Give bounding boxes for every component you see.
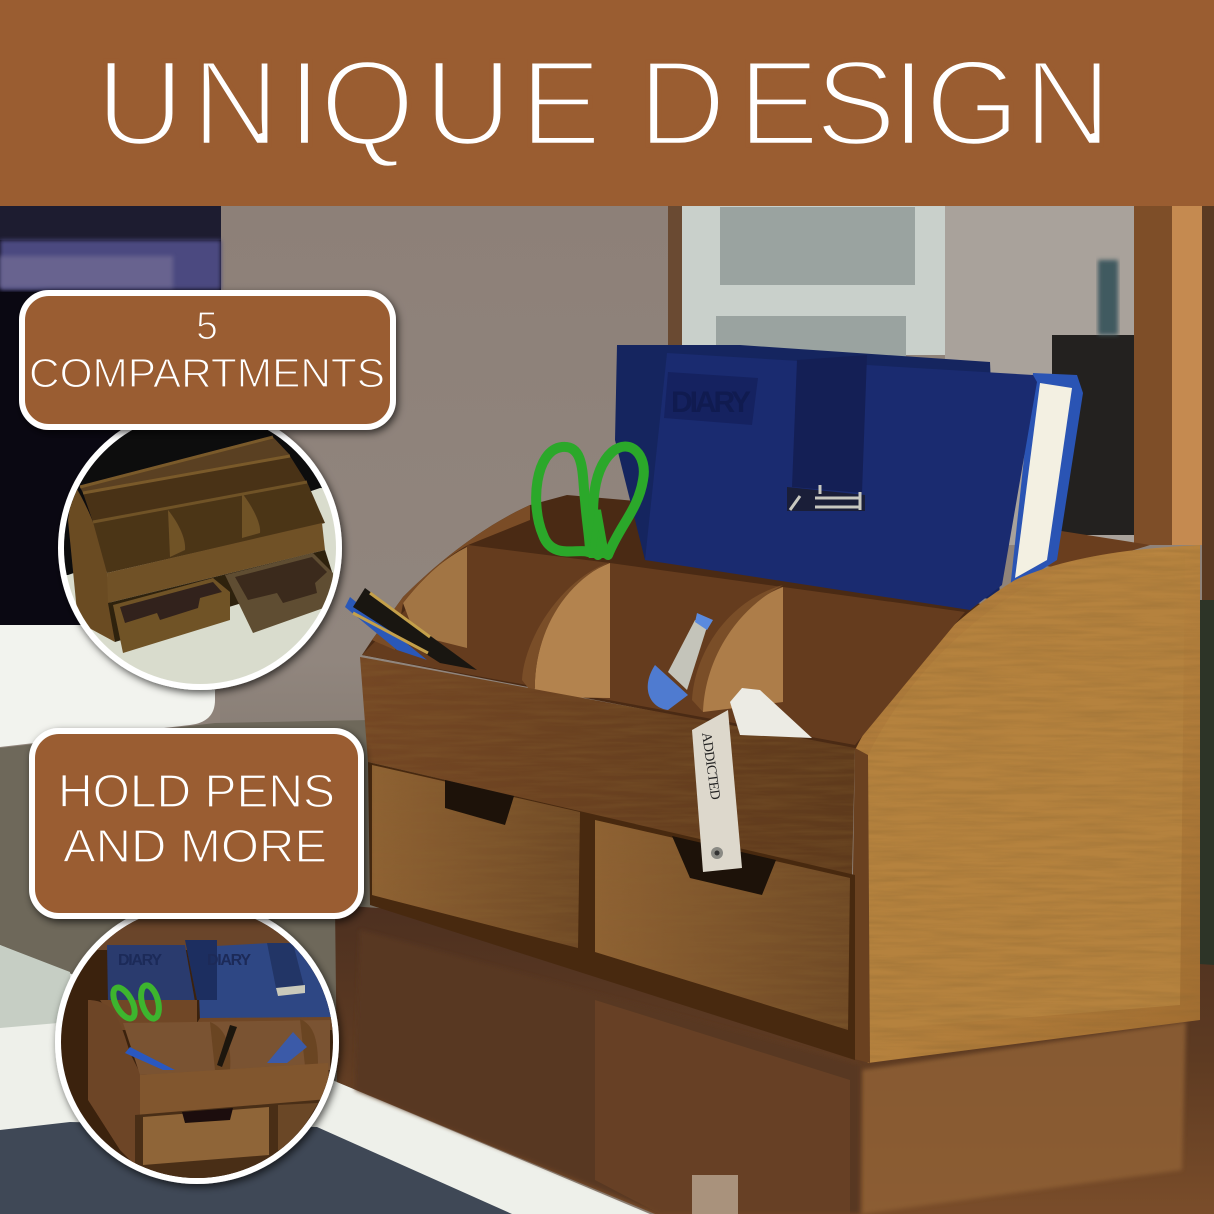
measuring tape tag — [692, 688, 812, 872]
pens — [125, 1047, 175, 1070]
pen — [345, 588, 477, 670]
callout: 5 compartments: COMPARTMENTS — [29, 350, 385, 396]
back diary — [615, 345, 1000, 600]
top back board — [80, 437, 290, 493]
middle back board — [362, 545, 965, 745]
organizer with diaries and tools — [345, 345, 1200, 1063]
title banner — [0, 0, 1214, 206]
callout: 5 compartments: 5 — [196, 305, 218, 348]
diary page block — [1015, 383, 1072, 578]
organizer side panel — [852, 545, 1200, 1063]
divider two — [703, 587, 783, 712]
right drawer — [595, 820, 850, 1030]
green scissors — [536, 447, 644, 555]
callout: hold pens and more — [32, 731, 361, 916]
photo circle: holds pens and more — [51, 919, 345, 1191]
title text: UNIQUE DESIGN — [96, 35, 1112, 171]
lower frame — [368, 762, 855, 1060]
lower body — [135, 1100, 320, 1178]
diary strap and clasp — [792, 355, 867, 493]
blue stamp tool — [648, 613, 713, 710]
front board — [140, 1063, 330, 1115]
front board — [107, 523, 325, 603]
right corner post — [850, 748, 870, 1063]
photo circle: five compartments — [58, 430, 349, 699]
shadow under board — [108, 550, 333, 642]
compartment back — [123, 1020, 330, 1075]
right drawer — [225, 553, 333, 633]
callout: hold pens and more: HOLD PENS — [58, 765, 335, 817]
third row with dividers — [93, 482, 325, 573]
organizer with diaries and tools: DIARY — [671, 386, 751, 419]
left side inner — [403, 547, 467, 648]
divider one — [535, 563, 610, 698]
callout: 5 compartments — [22, 293, 393, 427]
green scissors — [109, 984, 162, 1022]
back cover of main diary — [1010, 373, 1083, 590]
rear compartment — [362, 495, 1000, 750]
rear wall strip — [1040, 530, 1150, 570]
organizer side — [88, 1000, 140, 1170]
drawer — [143, 1107, 269, 1165]
diaries — [107, 945, 195, 1000]
table surface — [0, 905, 1214, 1214]
second slot — [83, 456, 307, 522]
organizer side — [68, 489, 115, 642]
main diary — [645, 353, 1037, 610]
left drawer — [113, 578, 230, 653]
rear wood slot — [100, 1000, 335, 1030]
left drawer — [372, 765, 580, 948]
measuring tape tag: ADDICTED — [698, 731, 722, 801]
callout: hold pens and more: AND MORE — [63, 820, 327, 872]
upper front board — [360, 657, 855, 875]
photo circle: holds pens and more: DIARY — [118, 952, 162, 969]
photo circle: holds pens and more: DIARY — [207, 952, 251, 969]
